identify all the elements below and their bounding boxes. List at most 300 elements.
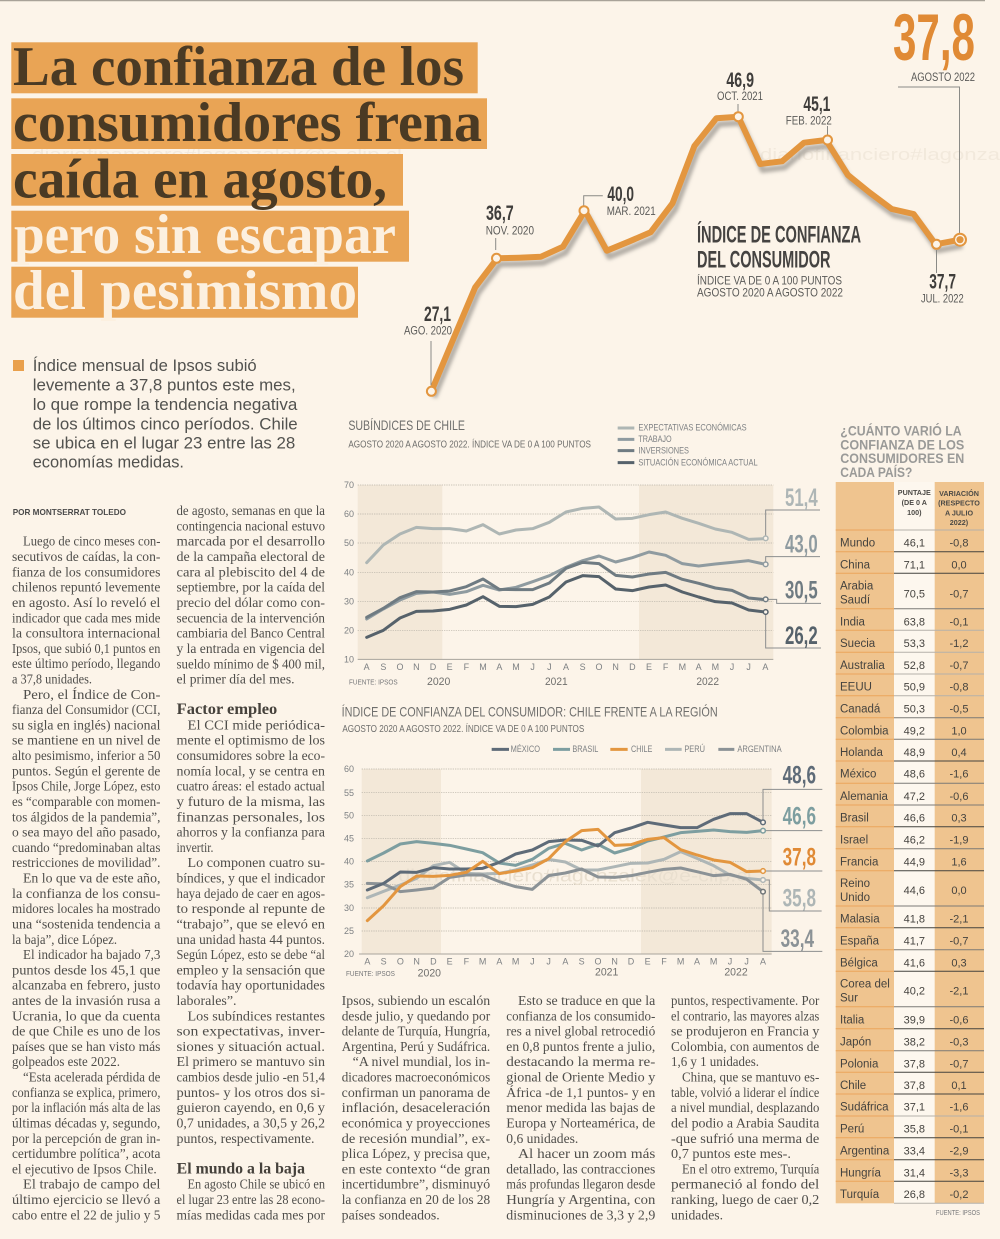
body text: column 1: cabo entre el 22 de julio y 5 — [12, 1207, 161, 1222]
line: México — [367, 814, 763, 890]
table header: (RESPECTO — [938, 499, 980, 508]
body text: column 2: de la campaña electoral de — [176, 549, 325, 564]
data label: Nov 2020 — [486, 202, 534, 237]
source: FUENTE: IPSOS — [349, 677, 398, 686]
body text: column 2: cara al plebiscito del 4 de — [176, 564, 325, 579]
data label: Jul 2022: 37,7 — [929, 271, 956, 294]
body text: column 2: y la entrada en vigencia del — [176, 641, 325, 656]
chart heading: AGOSTO 2020 A AGOSTO 2022. ÍNDICE VA DE 0 A 100 PUNTOS — [348, 437, 591, 450]
legend: TRABAJO — [638, 434, 672, 444]
table rows: 1,0 — [951, 725, 967, 737]
table rows: 40,2 — [904, 986, 925, 998]
body text: column 1: la baja”, dice López. — [12, 932, 117, 947]
title: pero sin escapar — [14, 204, 396, 266]
table rows: Unido — [840, 892, 870, 904]
data label: Mar 2021 — [607, 183, 656, 218]
legend — [618, 423, 758, 468]
body text: column 2: puntos- y los otros dos si- — [176, 1085, 326, 1100]
data label: Oct 2021: 46,9 — [726, 69, 754, 92]
body text: column 1 — [12, 534, 161, 1222]
body text: column 3: la confianza en 20 de los 28 — [342, 1192, 490, 1207]
body text: column 1: El trabajo de campo del — [23, 1177, 161, 1192]
table rows: -3,3 — [950, 1167, 968, 1179]
table rows: Malasia — [840, 914, 880, 926]
y axis labels: 30 — [344, 596, 354, 606]
body text: column 1: por la inflación más alta de las — [12, 1100, 160, 1115]
table rows: Holanda — [840, 747, 883, 759]
table rows: 37,8 — [904, 1080, 925, 1092]
table rows: -2,1 — [950, 986, 968, 998]
body text: column 5: table, volvió a liderar el índice — [671, 1085, 819, 1100]
data label: Feb 2022: FEB. 2022 — [786, 113, 832, 127]
table rows: India — [840, 616, 866, 628]
main line chart: consumer confidence index — [404, 0, 975, 397]
table header: 2022) — [950, 518, 969, 527]
body text: column 2: 0,7 unidades, a 30,5 y 26,2 — [176, 1116, 325, 1130]
body text: column 3: incertidumbre”, disminuyó — [342, 1177, 490, 1192]
body text: column 1: Luego de cinco meses con- — [23, 534, 161, 549]
body text: column 1: puntos. Según el gerente de — [12, 763, 160, 778]
table rows: 39,9 — [904, 1014, 925, 1026]
table rows: Sur — [840, 993, 858, 1005]
body text: column 5: En el otro extremo, Turquía — [682, 1161, 819, 1176]
deck text: de los últimos cinco períodos. Chile — [33, 414, 298, 433]
table header: VARIACIÓN — [939, 489, 979, 498]
table rows: Israel — [840, 834, 868, 846]
table rows: -0,7 — [950, 660, 968, 672]
deck text: se ubica en el lugar 23 entre las 28 — [33, 434, 295, 453]
body text: column 3: delante de Turquía, Hungría, — [342, 1024, 490, 1039]
legend: SITUACIÓN ECONÓMICA ACTUAL — [638, 458, 758, 468]
body text: column 5 — [671, 993, 820, 1222]
body text: column 3: en este contexto “de gran — [342, 1161, 490, 1176]
title: consumidores frena — [13, 92, 482, 154]
deck text: lo que rompe la tendencia negativa — [33, 395, 298, 414]
body text: column 2: mente el optimismo de los — [176, 733, 325, 748]
table heading — [840, 424, 964, 480]
year labels: 2020 — [427, 676, 450, 688]
year labels: 2021 — [595, 966, 618, 978]
body text: column 4: en 0,8 puntos frente a julio, — [506, 1039, 655, 1054]
body text: column 4: confianza de los consumido- — [506, 1008, 656, 1023]
table rows: Alemania — [840, 791, 889, 803]
table heading: ¿CUÁNTO VARIÓ LA — [840, 424, 962, 439]
table rows: 53,3 — [904, 638, 925, 650]
chart heading: SUBÍNDICES DE CHILE — [348, 417, 465, 433]
body text: column 2: el primer día del mes. — [176, 672, 294, 687]
table rows: 63,8 — [904, 616, 925, 628]
data label: Feb 2022: 45,1 — [803, 93, 831, 116]
y axis labels: 20 — [344, 625, 354, 635]
body text: column 1: puntos desde los 45,1 que — [12, 962, 160, 977]
table rows: -0,2 — [950, 1189, 968, 1201]
body text: column 1: antes de la invasión rusa a — [12, 993, 160, 1008]
body text: column 2: Lo componen cuatro su- — [188, 855, 326, 870]
body text: column 4: gional de Oriente Medio y — [506, 1070, 656, 1085]
table rows: 48,6 — [904, 769, 925, 781]
data label: Mar 2021: 40,0 — [607, 183, 634, 206]
y axis labels: 35 — [344, 880, 354, 890]
table rows: 41,6 — [904, 957, 925, 969]
y axis labels: 40 — [344, 567, 354, 577]
line: inversiones — [367, 562, 765, 617]
body text: column 3: económica y proyecciones — [342, 1116, 490, 1130]
source: FUENTE: IPSOS — [346, 969, 395, 978]
table: country scores — [836, 482, 984, 1203]
body text: column 5: el contrario, las mayores alzas — [671, 1008, 819, 1023]
body text: column 1: a 37,8 unidades. — [12, 672, 92, 686]
body text: column 2: nomía local, y se centra en — [176, 763, 325, 778]
chart heading: AGOSTO 2020 A AGOSTO 2022. ÍNDICE VA DE 0 A 100 PUNTOS — [342, 722, 585, 735]
year labels: 2020 — [418, 968, 441, 980]
year labels: 2021 — [545, 676, 568, 688]
table rows: -0,1 — [950, 1124, 968, 1136]
line: Perú — [367, 852, 763, 898]
body text: column 2: y futuro de la misma, las — [176, 794, 325, 809]
y axis labels: 30 — [344, 903, 354, 913]
table rows: 50,3 — [904, 703, 925, 715]
table rows: -0,3 — [950, 1036, 968, 1048]
body text: column 4: Hungría y Argentina, con — [506, 1192, 656, 1207]
body text: column 2: todavía hay oportunidades — [176, 978, 325, 993]
table rows: -1,6 — [950, 769, 968, 781]
body text: column 1: Pero, el Índice de Con- — [23, 687, 161, 702]
data label: Aug 2020: 27,1 — [424, 303, 451, 326]
body text: column 1: confianza se explica, primero, — [12, 1085, 160, 1100]
deck text: economías medidas. — [33, 453, 184, 472]
chart: Chile sub-indices — [344, 417, 821, 688]
chart heading: ÍNDICE DE CONFIANZA DEL CONSUMIDOR: CHILE FRENTE A LA REGIÓN — [342, 704, 718, 720]
body text: column 1: por la percepción de gran in- — [12, 1131, 161, 1146]
body text: column 2: precio del dólar como con- — [176, 595, 326, 610]
body text: column 2: Los subíndices restantes — [188, 1008, 325, 1023]
table header: (DE 0 A — [902, 498, 927, 507]
table rows: -0,8 — [950, 538, 968, 550]
table rows: -0,6 — [950, 1014, 968, 1026]
end values: 37,8 — [783, 845, 816, 872]
year labels: 2022 — [696, 676, 719, 688]
end values: 30,5 — [785, 577, 818, 604]
y axis labels: 50 — [344, 810, 354, 820]
body text: column 3: confirman un panorama de — [342, 1085, 490, 1100]
body text: column 2: mías medidas cada mes por — [176, 1207, 325, 1222]
table rows: 70,5 — [904, 588, 925, 600]
body text: column 2 — [176, 503, 326, 1222]
main chart heading — [697, 220, 861, 299]
legend: EXPECTATIVAS ECONÓMICAS — [638, 423, 747, 433]
body text: column 2: cambios desde julio -en 51,4 — [176, 1070, 325, 1085]
table rows: Suecia — [840, 638, 876, 650]
table rows: Canadá — [840, 703, 881, 715]
table rows: 31,4 — [904, 1167, 925, 1179]
body text: column 4: Europa y Norteamérica, de — [506, 1116, 655, 1130]
table rows: Colombia — [840, 725, 889, 737]
body text: column 5: a nivel mundial, desplazando — [671, 1100, 820, 1115]
body text: column 1: se mantiene en un nivel de — [12, 733, 160, 748]
data label: Oct 2021: OCT. 2021 — [717, 89, 763, 103]
y axis labels: 50 — [344, 538, 354, 548]
table rows: Argentina — [840, 1145, 890, 1157]
year labels — [418, 966, 748, 980]
body text: column 1: fianza de los consumidores — [12, 564, 160, 579]
table rows: 46,2 — [904, 834, 925, 846]
body text: column 1: secutivos de caídas, la con- — [12, 549, 161, 564]
table rows: México — [840, 769, 876, 781]
table rows: 0,4 — [951, 747, 967, 759]
body text: column 1: “Esta acelerada pérdida de — [23, 1070, 160, 1085]
body text: column 2: ahorros y la confianza para — [176, 825, 325, 840]
body text: column 2: puntos, respectivamente. — [176, 1131, 314, 1146]
table rows: 0,0 — [951, 885, 967, 897]
table rows: -0,7 — [950, 1058, 968, 1070]
body text: column 1: midores locales ha mostrado — [12, 901, 161, 916]
table rows: -0,8 — [950, 682, 968, 694]
title: La confianza de los — [13, 36, 464, 98]
table rows: -1,2 — [950, 638, 968, 650]
data label: Aug 2020: AGO. 2020 — [404, 323, 452, 337]
body text: column 1: o sea mayo del año pasado, — [12, 825, 160, 840]
table rows: -2,1 — [950, 914, 968, 926]
body text: column 5: 1,6 y 1 unidades. — [671, 1054, 759, 1069]
body text: column 1: Ipsos Chile, Jorge López, esto — [12, 779, 161, 794]
body text: column 1: chilenos repuntó levemente — [12, 580, 160, 595]
title — [11, 36, 487, 322]
body text: column 4: detallado, las contracciones — [506, 1161, 655, 1176]
subheading: Factor empleo: Factor empleo — [177, 701, 278, 718]
body text: column 5: permaneció al fondo del — [671, 1177, 820, 1192]
main chart heading: DEL CONSUMIDOR — [697, 246, 830, 273]
body text: column 4: África -de 1,1 puntos- y en — [506, 1085, 656, 1100]
end values: 46,6 — [783, 804, 816, 831]
legend: INVERSIONES — [638, 445, 689, 455]
table rows: 0,0 — [951, 559, 967, 571]
table rows: 41,7 — [904, 935, 925, 947]
body text: column 2: son expectativas, inver- — [176, 1024, 326, 1039]
chart heading — [348, 417, 591, 450]
body text: column 1: la consultora internacional — [12, 626, 161, 641]
table rows: 71,1 — [904, 559, 925, 571]
line: expectativas económicas — [367, 507, 765, 563]
body text: column 5: China, que se mantuvo es- — [682, 1070, 820, 1085]
table rows: Arabia — [840, 581, 874, 593]
title: caída en agosto, — [13, 148, 387, 210]
table heading: CONSUMIDORES EN — [840, 451, 964, 466]
table rows: Italia — [840, 1014, 865, 1026]
table rows: 1,6 — [951, 856, 967, 868]
body text: column 1: Ucrania, lo que da cuenta — [12, 1008, 160, 1023]
table rows: 35,8 — [904, 1124, 925, 1136]
body text: column 1: es “comparable con momen- — [12, 794, 161, 809]
legend: PERÚ — [684, 744, 705, 754]
deck text — [13, 356, 298, 472]
table rows: Turquía — [840, 1189, 880, 1201]
body text: column 1: tos álgidos de la pandemia”, — [12, 809, 160, 824]
end values — [785, 485, 818, 650]
body text: column 1: su sigla en inglés) nacional — [12, 717, 161, 732]
x axis month labels: ASONDEFMAMJJASONDEFMAMJJA — [364, 662, 768, 672]
body text: column 4: 0,6 unidades. — [506, 1131, 578, 1146]
body text: column 4 — [506, 993, 656, 1222]
byline: POR MONTSERRAT TOLEDO — [13, 507, 126, 517]
y axis labels — [344, 480, 354, 664]
table rows: 46,6 — [904, 813, 925, 825]
table rows: -2,9 — [950, 1145, 968, 1157]
body text: column 1: este último período, llegando — [12, 656, 161, 671]
legend: MÉXICO — [511, 744, 540, 754]
body text: column 2: de agosto, semanas en que la — [176, 503, 325, 518]
body text: column 3: Argentina, Perú y Sudáfrica. — [342, 1039, 490, 1054]
table rows: Mundo — [840, 538, 875, 550]
table heading: CONFIANZA DE LOS — [840, 437, 964, 452]
line: situación económica actual — [367, 576, 765, 637]
body text: column 3: Ipsos, subiendo un escalón — [342, 993, 490, 1008]
body text: column 2: el lugar 23 entre las 28 econo- — [176, 1192, 325, 1207]
body text: column 1: fianza del Consumidor (CCI, — [12, 702, 160, 717]
table source: FUENTE: IPSOS — [936, 1210, 980, 1217]
table rows: -0,7 — [950, 588, 968, 600]
line: Chile — [367, 829, 763, 921]
table header: PUNTAJE — [898, 488, 931, 497]
body text: column 1: En lo que va de este año, — [23, 870, 160, 886]
table rows: Polonia — [840, 1058, 879, 1070]
end values: 48,6 — [783, 762, 816, 789]
table header: A JULIO — [945, 508, 973, 517]
watermark: diariofinanciero#lagonzalek@e-clip.cl — [398, 866, 752, 886]
table rows: 50,9 — [904, 682, 925, 694]
body text: column 1: Ipsos, que subió 0,1 puntos en — [12, 641, 161, 656]
body text: column 5: puntos, respectivamente. Por — [671, 993, 820, 1008]
body text: column 2: to responde al repunte de — [176, 901, 325, 916]
body text: column 5: Colombia, con aumentos de — [671, 1039, 819, 1054]
body text: column 2: invertir. — [176, 840, 214, 855]
table rows: Francia — [840, 856, 879, 868]
table rows: 0,3 — [951, 813, 967, 825]
body text: column 2: contingencia nacional estuvo — [176, 518, 325, 533]
table rows: Japón — [840, 1036, 871, 1048]
body text: column 3: desde julio, y quedando por — [342, 1008, 491, 1023]
body text: column 1: últimas décadas y, segundo, — [12, 1116, 160, 1130]
body text: column 1: restricciones de movilidad”. — [12, 855, 160, 870]
body text: column 3: “A nivel mundial, los in- — [353, 1054, 491, 1069]
table rows: 37,8 — [904, 1058, 925, 1070]
end values: 26,2 — [785, 623, 818, 650]
table rows: 37,1 — [904, 1102, 925, 1114]
body text: column 3: inflación, desaceleración — [342, 1100, 490, 1115]
body text: column 4: Esto se traduce en que la — [518, 993, 655, 1008]
body text: column 1: el ejecutivo de Ipsos Chile. — [12, 1161, 157, 1176]
table rows: 0,3 — [951, 957, 967, 969]
body text: column 1: último ejercicio se llevó a — [12, 1192, 160, 1207]
y axis labels: 60 — [344, 764, 354, 774]
table rows: Reino — [840, 878, 870, 890]
table rows: 49,2 — [904, 725, 925, 737]
table rows: 41,8 — [904, 914, 925, 926]
watermark: diariofinanciero#lagonza — [760, 145, 1000, 164]
table rows: China — [840, 559, 871, 571]
body text: column 4: res a nivel global retrocedió — [506, 1024, 656, 1039]
big figure: Aug 2022: AGOSTO 2022 — [911, 70, 975, 84]
body text: column 2: cambiaria del Banco Central — [176, 626, 325, 641]
table rows: España — [840, 935, 880, 947]
table rows: -0,6 — [950, 791, 968, 803]
table rows: 44,9 — [904, 856, 925, 868]
body text: column 3: de recesión mundial”, ex- — [342, 1131, 491, 1146]
main chart heading: AGOSTO 2020 A AGOSTO 2022 — [697, 285, 843, 299]
end values: 33,4 — [781, 926, 814, 953]
body text: column 1: El indicador ha bajado 7,3 — [23, 947, 161, 962]
deck text: levemente a 37,8 puntos este mes, — [33, 376, 296, 395]
table rows: 26,8 — [904, 1189, 925, 1201]
big figure: Aug 2022 — [893, 0, 975, 84]
y axis labels: 45 — [344, 834, 354, 844]
table rows: Sudáfrica — [840, 1102, 889, 1114]
body text: column 2: Según López, esto se debe “al — [176, 947, 325, 962]
table rows: Chile — [840, 1080, 866, 1092]
body text: column 5: del podio a Arabia Saudita — [671, 1116, 819, 1130]
subheading: El mundo a la baja: El mundo a la baja — [177, 1160, 305, 1177]
line: trabajo — [367, 552, 765, 619]
legend: BRASIL — [572, 744, 598, 754]
end values: 51,4 — [785, 485, 818, 512]
y axis labels — [344, 764, 354, 959]
table rows: 46,1 — [904, 538, 925, 550]
body text: column 2: una unidad hasta 44 puntos. — [176, 932, 325, 947]
table header — [898, 488, 980, 527]
table rows: -0,1 — [950, 616, 968, 628]
legend: CHILE — [631, 744, 652, 754]
body text: column 4: menor medida las bajas de — [506, 1100, 655, 1115]
body text: column 1: en agosto. Así lo reveló el — [12, 595, 161, 610]
body text: column 3: dicadores macroeconómicos — [342, 1070, 490, 1085]
body text: column 2: guieron cayendo, en 0,6 y — [176, 1100, 325, 1115]
body text: column 3 — [342, 993, 491, 1222]
y axis labels: 55 — [344, 788, 354, 798]
title: del pesimismo — [13, 260, 357, 322]
body text: column 2: El primero se mantuvo sin — [176, 1054, 325, 1069]
body text: column 5: se produjeron en Francia y — [671, 1024, 820, 1039]
legend: ARGENTINA — [737, 744, 782, 754]
body text: column 1: alto pesimismo, inferior a 50 — [12, 748, 161, 763]
body text: column 5: 0,7 puntos este mes-. — [671, 1146, 791, 1161]
body text: column 4: Al hacer un zoom más — [518, 1146, 655, 1161]
watermark: diariofinanciero#lagonzalek@e-clip.cl — [32, 145, 402, 164]
legend — [492, 744, 782, 754]
body text: column 2: secuencia de la intervención — [176, 610, 325, 625]
year labels — [427, 676, 719, 688]
table heading: CADA PAÍS? — [840, 465, 912, 480]
body text: column 2: septiembre, por la caída del — [176, 580, 325, 595]
table rows: Bélgica — [840, 957, 878, 969]
body text: column 2: empleo y la sensación que — [176, 962, 325, 977]
y axis labels: 70 — [344, 480, 354, 490]
table rows: 48,9 — [904, 747, 925, 759]
table rows: 44,6 — [904, 885, 925, 897]
body text: column 1: indicador que cada mes mide — [12, 610, 160, 625]
end values — [781, 762, 816, 953]
data label: Mar 2021: MAR. 2021 — [607, 204, 656, 218]
table rows: EEUU — [840, 682, 872, 694]
body text: column 1: alcanzaba en febrero, justo — [12, 978, 161, 993]
data label: Nov 2020: 36,7 — [486, 202, 514, 225]
y axis labels: 20 — [344, 949, 354, 959]
data label: Oct 2021 — [717, 69, 763, 103]
body text: column 4: disminuciones de 3,3 y 2,9 — [506, 1207, 656, 1222]
table rows: 38,2 — [904, 1036, 925, 1048]
body text: column 1: golpeados este 2022. — [12, 1054, 120, 1069]
table rows: -1,9 — [950, 834, 968, 846]
body text: column 2: finanzas personales, los — [176, 809, 325, 824]
body text: column 2: haya dejado de caer en agos- — [176, 886, 325, 901]
